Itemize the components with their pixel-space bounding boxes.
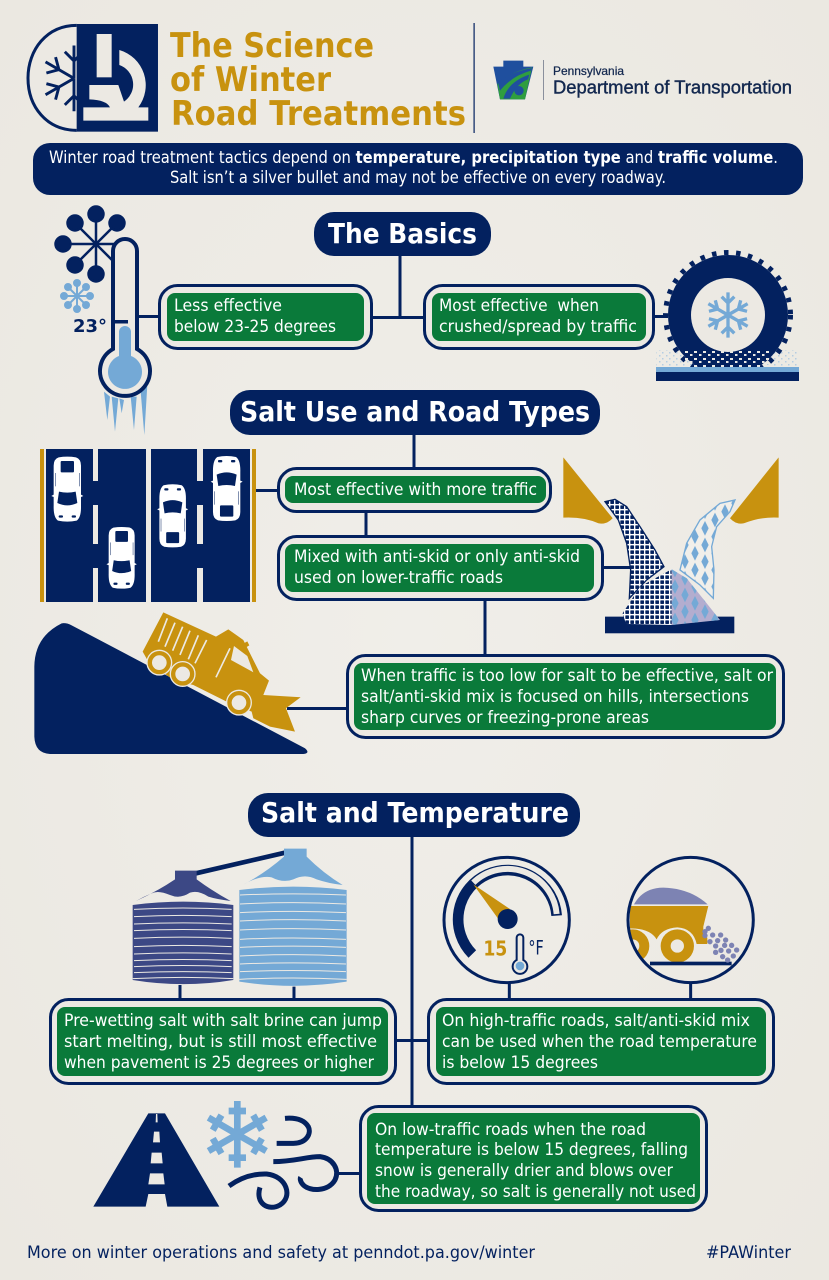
heading: The Basics: The Basics bbox=[328, 217, 477, 250]
icon: road, snowflake and wind bbox=[93, 1101, 337, 1207]
callout: when traffic is too low: When traffic is too low for salt to be effective, salt or bbox=[361, 666, 773, 685]
callout: most effective with more traffic bbox=[278, 468, 550, 512]
callout: low-traffic roads: snow is generally drier and blows over bbox=[375, 1161, 673, 1180]
heading: Salt Use and Road Types bbox=[230, 390, 600, 435]
connectors: road types bbox=[256, 434, 631, 710]
icon: temperature gauge at 15 degrees: 15 bbox=[483, 937, 507, 961]
heading: The Basics bbox=[314, 212, 491, 256]
callout: low-traffic roads: On low-traffic roads when the road bbox=[375, 1120, 646, 1139]
header logo: microscope and snowflake bbox=[28, 24, 158, 132]
PennDOT logo: Pennsylvania bbox=[553, 64, 624, 78]
callout: low-traffic roads: temperature is below 15 degrees, falling bbox=[375, 1140, 688, 1159]
heading: Salt Use and Road Types: Salt Use and Road Types bbox=[240, 395, 590, 428]
callout: mixed with anti-skid: used on lower-traffic roads bbox=[294, 568, 503, 587]
callout: less effective: Less effective bbox=[174, 296, 282, 315]
callout: most effective: crushed/spread by traffic bbox=[439, 317, 637, 336]
callout: less effective: below 23-25 degrees bbox=[174, 317, 336, 336]
icon: temperature gauge at 15 degrees: °F bbox=[528, 936, 544, 959]
PennDOT logo bbox=[493, 60, 792, 100]
title bbox=[170, 26, 466, 134]
callout: pre-wetting salt: Pre-wetting salt with salt brine can jump bbox=[64, 1011, 382, 1030]
connectors: salt and temperature bbox=[339, 836, 428, 1175]
callout: when traffic is too low bbox=[348, 656, 784, 738]
callout: pre-wetting salt: start melting, but is still most effective bbox=[64, 1032, 377, 1051]
callout: when traffic is too low: sharp curves or freezing-prone areas bbox=[361, 708, 649, 727]
icon: thermometer with snowflakes: 23° bbox=[73, 316, 107, 337]
intro banner bbox=[33, 143, 803, 195]
callout: when traffic is too low: salt/anti-skid mix is focused on hills, intersections bbox=[361, 687, 749, 706]
callout: pre-wetting salt bbox=[50, 1000, 396, 1084]
callout: pre-wetting salt: when pavement is 25 degrees or higher bbox=[64, 1053, 374, 1072]
icon: thermometer with snowflakes bbox=[56, 206, 150, 435]
icon: plow truck on hill bbox=[34, 612, 307, 754]
callout: most effective: Most effective when bbox=[439, 296, 599, 315]
footer hashtag: #PAWinter bbox=[706, 1243, 791, 1263]
icon: salt and anti-skid spreaders with pile bbox=[563, 457, 779, 633]
callout: low-traffic roads: the roadway, so salt is generally not used bbox=[375, 1182, 696, 1201]
callout: low-traffic roads bbox=[360, 1106, 706, 1210]
title: The Science bbox=[170, 26, 374, 66]
icon: spreader truck bbox=[616, 857, 753, 998]
intro banner: Salt isn’t a silver bullet and may not be effective on every roadway. bbox=[170, 168, 666, 187]
icon: brine silos bbox=[133, 849, 347, 999]
intro banner: Winter road treatment tactics depend on temperature, precipitation type and traffic volume. bbox=[49, 148, 778, 167]
heading: Salt and Temperature: Salt and Temperature bbox=[261, 796, 569, 829]
callout: high-traffic roads: On high-traffic roads, salt/anti-skid mix bbox=[442, 1011, 750, 1030]
PennDOT logo: Department of Transportation bbox=[553, 78, 792, 98]
callout: mixed with anti-skid bbox=[278, 536, 602, 600]
callout: mixed with anti-skid: Mixed with anti-skid or only anti-skid bbox=[294, 547, 580, 566]
title: Road Treatments bbox=[171, 94, 466, 134]
callout: most effective bbox=[424, 286, 654, 348]
icon: road with cars bbox=[40, 449, 256, 602]
heading: Salt and Temperature bbox=[248, 793, 580, 837]
icon: tire on road bbox=[656, 252, 799, 381]
callout: most effective with more traffic: Most effective with more traffic bbox=[294, 480, 537, 499]
title: of Winter bbox=[170, 60, 331, 100]
callout: high-traffic roads: is below 15 degrees bbox=[442, 1053, 598, 1072]
callout: less effective bbox=[160, 286, 372, 348]
callout: high-traffic roads: can be used when the road temperature bbox=[442, 1032, 757, 1051]
callout: high-traffic roads bbox=[428, 1000, 774, 1084]
icon: temperature gauge at 15 degrees bbox=[444, 857, 569, 998]
connectors: the basics bbox=[139, 255, 668, 319]
footer link text: More on winter operations and safety at penndot.pa.gov/winter bbox=[27, 1243, 535, 1263]
